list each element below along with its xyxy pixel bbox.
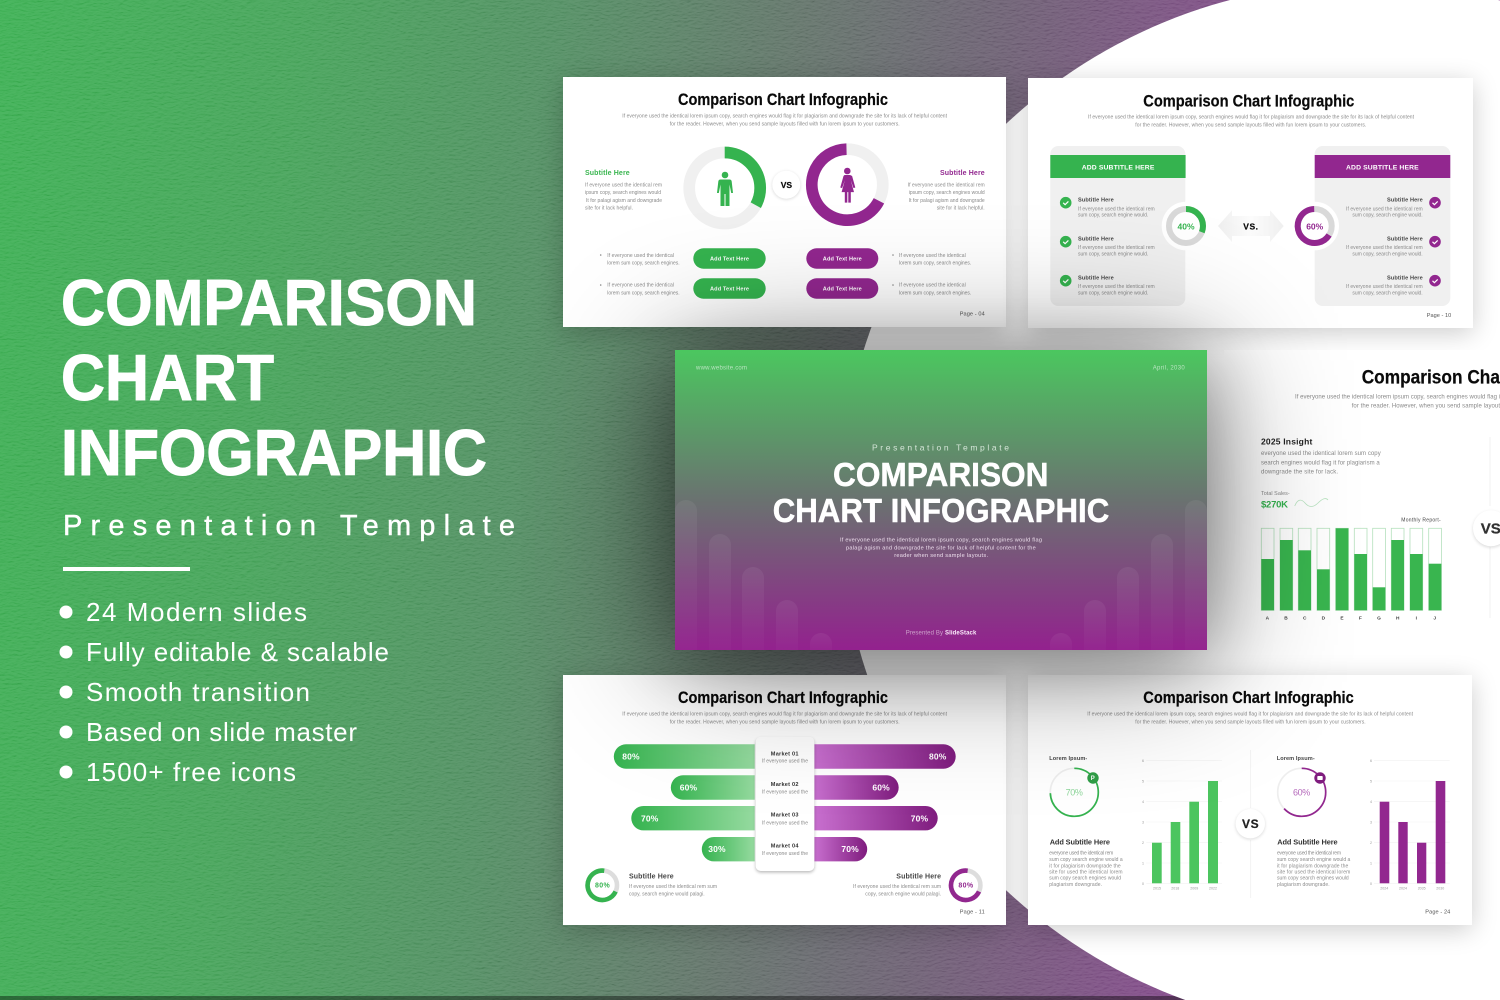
left progress ring: 70% [1066, 788, 1083, 798]
bar values: 70% [911, 813, 928, 823]
insight text: search engines would flag it for plagiarism a [1261, 460, 1380, 466]
intro text: for the reader. However, when you send sample layout [1352, 404, 1500, 410]
total sales: Total Sales- [1261, 491, 1290, 497]
left check list: sum copy, search engine would. [1078, 291, 1148, 297]
green bar chart: 2018 [1171, 886, 1179, 890]
right bullets: lorem sum copy, search engines. [899, 290, 971, 296]
purple donut [800, 137, 895, 232]
right text block: it for plagiarism downgrade the [1277, 863, 1349, 869]
cover title: CHART INFOGRAPHIC [773, 492, 1109, 529]
divider [1489, 437, 1491, 618]
feature list: Smooth transition [86, 677, 310, 707]
left mini donut: 80% [595, 883, 610, 890]
left caption: Subtitle Here [629, 873, 674, 880]
right card: ADD SUBTITLE HERE [1346, 164, 1419, 171]
intro text: If everyone used the identical lorem ipsum copy, search engines would flag it for plagiarism and downgrade the site for its lack of helpful content [1087, 712, 1414, 718]
insight text: downgrade the site for lack. [1261, 470, 1338, 476]
purple bar chart: 2035 [1418, 886, 1426, 890]
purple buttons [806, 248, 878, 299]
right text block: plagiarism downgrade. [1277, 882, 1330, 888]
bar values: 60% [680, 782, 697, 792]
right check list: If everyone used the identical rem [1346, 284, 1423, 290]
panel: slide page 04 donut comparison [563, 77, 1006, 332]
green buttons [693, 248, 766, 299]
left check list: Subtitle Here [1078, 236, 1114, 242]
feature list [60, 597, 389, 787]
left text block: site for used the identical lorem [1049, 870, 1123, 876]
left check list: Subtitle Here [1078, 275, 1114, 281]
page number: Page - 04 [960, 312, 985, 318]
market card: Market 02 [771, 782, 798, 788]
right subtitle text: Subtitle Here [940, 170, 985, 177]
bar values: 60% [872, 782, 890, 792]
right text block: Add Subtitle Here [1277, 837, 1338, 846]
right check list: Subtitle Here [1387, 236, 1423, 242]
bar values: 80% [622, 752, 640, 762]
left text block [1049, 837, 1123, 888]
purple bar chart: 2024 [1399, 886, 1407, 890]
right bullets: lorem sum copy, search engines. [899, 261, 971, 267]
bar values: 70% [841, 844, 859, 854]
purple buttons: Add Text Here [823, 287, 862, 293]
title: CHART [61, 341, 274, 414]
left subtitle text: Subtitle Here [585, 170, 630, 177]
purple bar chart [1370, 759, 1450, 890]
cover description: reader when send sample layouts. [894, 553, 988, 559]
right text block: sum copy search engines would [1277, 876, 1349, 882]
green bar chart: 2015 [1153, 886, 1161, 890]
right subtitle text: ipsum copy, search engines would [909, 190, 985, 196]
arrow: double headed VS [1218, 210, 1284, 242]
right check list: Subtitle Here [1387, 197, 1423, 203]
green bar chart: 2 [1142, 841, 1144, 845]
green bar chart: 4 [1142, 800, 1144, 804]
right subtitle text: site for it lack helpful. [937, 206, 985, 212]
divider line [63, 567, 190, 571]
presenter credit: Presented By [906, 630, 943, 636]
right caption: Subtitle Here [896, 873, 941, 880]
intro text [622, 712, 948, 726]
cover description: If everyone used the identical lorem ipsum copy, search engines would flag [840, 537, 1042, 543]
intro text [1088, 115, 1415, 128]
purple bar chart: 1 [1370, 862, 1372, 866]
intro text: If everyone used the identical lorem ipsum copy, search engines would flag it for plagiarism and downgrade the site for its lack of helpful content [1088, 115, 1415, 121]
intro text: for the reader. However, when you send sample layouts filled with fun lorem ipsum to your customers. [670, 720, 900, 726]
panel: slide insight bars (cropped at right edge) [1224, 350, 1500, 650]
monthly bar chart: F [1359, 616, 1362, 622]
purple bar chart: 6 [1370, 759, 1372, 763]
intro text: If everyone used the identical lorem ipsum copy, search engines would flag it for plagiarism and downgrade the site for its lack of helpful content [622, 114, 948, 120]
left progress ring: P [1091, 776, 1095, 782]
left progress ring: Lorem Ipsum- [1049, 756, 1087, 762]
left check list: Subtitle Here [1078, 197, 1114, 203]
panel: slide page 11 diverging bars [563, 675, 1006, 930]
right check list: Subtitle Here [1387, 275, 1423, 281]
left check list: If everyone used the identical rem [1078, 206, 1155, 212]
right mini donut: 80% [958, 883, 974, 890]
right subtitle text [908, 170, 985, 212]
intro text [622, 114, 948, 128]
left text block: it for plagiarism downgrade the [1049, 863, 1121, 869]
bar values: 70% [641, 813, 659, 823]
right bullets: If everyone used the identical [899, 283, 966, 289]
VS badge [1236, 809, 1265, 839]
total sales [1261, 491, 1328, 510]
market card: If everyone used the [762, 789, 808, 795]
panel: cover slide [675, 350, 1207, 650]
40% donut: 40% [1178, 221, 1195, 231]
green bar chart: 5 [1142, 780, 1144, 784]
presenter credit: SlideStack [945, 630, 977, 636]
cover title: COMPARISON [833, 456, 1048, 493]
icon: woman [840, 168, 855, 203]
intro text: If everyone used the identical lorem ipsum copy, search engines would flag it for plagiarism and downgrade the site for its lack of helpful content [622, 712, 948, 718]
purple bar chart: 0 [1370, 882, 1372, 886]
left subtitle text: It for palagi agism and downgrade [586, 198, 662, 204]
left check list: If everyone used the identical rem [1078, 284, 1155, 290]
heading: Comparison Chart Infographic [1143, 689, 1354, 707]
left bullets: lorem sum copy, search engines. [607, 261, 680, 267]
intro text: for the reader. However, when you send sample layouts filled with fun lorem ipsum to your customers. [1135, 720, 1366, 726]
intro text: for the reader. However, when you send sample layouts filled with fun lorem ipsum to your customers. [1135, 122, 1366, 128]
left subtitle text: If everyone used the identical rem [585, 182, 662, 188]
title [61, 266, 487, 489]
cover description [840, 537, 1042, 559]
left caption [629, 873, 717, 898]
purple bar chart: 2 [1370, 841, 1372, 845]
right check list [1346, 197, 1441, 297]
panel: slide page 24 bar charts [1028, 675, 1472, 930]
left subtitle text: ipsum copy, search engines would [585, 190, 661, 196]
left caption: copy, search engine would palagi. [629, 892, 705, 898]
left check list [1060, 197, 1155, 297]
VS badge [772, 171, 800, 200]
bar values [622, 752, 947, 854]
market card: Market 03 [771, 813, 798, 819]
monthly bar chart: J [1433, 616, 1436, 622]
headline block [60, 266, 515, 787]
left check list: If everyone used the identical rem [1078, 245, 1155, 251]
left bullets [600, 253, 680, 296]
monthly bar chart: G [1377, 616, 1381, 622]
green bar chart [1142, 759, 1222, 890]
left bullets: If everyone used the identical [607, 283, 674, 289]
page number: Page - 11 [960, 910, 985, 916]
left text block: sum copy search engine would a [1049, 857, 1123, 863]
purple bar chart: 5 [1370, 780, 1372, 784]
arrow: double headed VS: VS. [1243, 221, 1258, 231]
left check list: sum copy, search engine would. [1078, 213, 1148, 219]
right bullets [892, 253, 971, 296]
purple bars [814, 744, 956, 861]
total sales: $270K [1261, 499, 1288, 510]
intro text [1087, 712, 1414, 726]
purple bar chart: 4 [1370, 800, 1372, 804]
60% donut: 60% [1306, 221, 1324, 231]
green bar chart: 0 [1142, 882, 1144, 886]
left bullets: lorem sum copy, search engines. [607, 290, 680, 296]
market card: Market 04 [771, 843, 799, 849]
bar values: 30% [708, 844, 726, 854]
purple bar chart: 3 [1370, 820, 1372, 824]
icon: man [717, 172, 733, 206]
subtitle: Presentation Template [63, 510, 515, 542]
right caption: If everyone used the identical rem sum [853, 884, 941, 890]
right progress ring [1277, 756, 1326, 816]
bar values: 80% [929, 752, 947, 762]
left subtitle text [585, 170, 662, 212]
right caption: copy, search engine would palagi. [865, 892, 941, 898]
right text block: everyone used the identical rem [1277, 851, 1341, 857]
right check list: sum copy, search engine would. [1352, 252, 1423, 258]
bottom edge band [0, 996, 1500, 1000]
VS badge [1473, 510, 1500, 548]
market card: If everyone used the [762, 758, 808, 764]
right text block: sum copy search engine would a [1277, 857, 1351, 863]
left text block: plagiarism downgrade. [1049, 882, 1102, 888]
left card: ADD SUBTITLE HERE [1082, 164, 1155, 171]
right check list: If everyone used the identical rem [1346, 206, 1423, 212]
website and date [695, 365, 1185, 371]
right check list: sum copy, search engine would. [1352, 213, 1423, 219]
right caption [853, 873, 941, 898]
cover description: palagi agism and downgrade the site for lack of helpful content for the [846, 545, 1036, 551]
intro text: If everyone used the identical lorem ipsum copy, search engines would flag i [1295, 395, 1500, 401]
insight text [1261, 436, 1381, 476]
feature list: Based on slide master [86, 717, 357, 747]
panel: slide page 10 check lists [1028, 78, 1473, 333]
VS badge: VS [1242, 817, 1259, 831]
right bullets: If everyone used the identical [899, 253, 966, 259]
green buttons: Add Text Here [710, 257, 749, 263]
right text block [1277, 837, 1351, 888]
heading: Comparison Chart Infographic [678, 91, 888, 109]
right subtitle text: It for palagi agism and downgrade [909, 198, 985, 204]
market card: If everyone used the [762, 820, 808, 826]
white circle backdrop [840, 0, 1500, 1000]
left check list: sum copy, search engine would. [1078, 252, 1148, 258]
green bars [614, 744, 755, 861]
right mini donut [946, 866, 985, 905]
cover eyebrow: Presentation Template [872, 443, 1009, 453]
green bar chart: 2009 [1190, 886, 1198, 890]
monthly bar chart: H [1396, 616, 1400, 622]
green bar chart: 6 [1142, 759, 1144, 763]
left card [1050, 146, 1186, 306]
left mini donut [583, 866, 622, 905]
right progress ring: 60% [1293, 788, 1310, 798]
intro text [1295, 395, 1500, 410]
monthly bar chart: A [1266, 616, 1270, 622]
right check list: sum copy, search engine would. [1352, 291, 1423, 297]
insight text: 2025 Insight [1261, 436, 1312, 446]
VS badge: VS [781, 180, 792, 190]
heading: Comparison Chart Infographic [678, 689, 888, 707]
left text block: sum copy search engines would [1049, 876, 1121, 882]
left progress ring [1049, 756, 1099, 816]
60% donut [1290, 202, 1339, 250]
website and date: www.website.com [695, 365, 747, 371]
intro text: for the reader. However, when you send sample layouts filled with fun lorem ipsum to your customers. [670, 122, 900, 128]
left text block: Add Subtitle Here [1050, 837, 1110, 846]
monthly bar chart: E [1340, 616, 1344, 622]
purple bar chart: 2030 [1436, 886, 1444, 890]
heading: Comparison Chart Infographic [1143, 92, 1354, 110]
market card: If everyone used the [762, 851, 808, 857]
green bar chart: 3 [1142, 820, 1144, 824]
green bar chart: 1 [1142, 862, 1144, 866]
right text block: site for used the identical lorem [1277, 870, 1350, 876]
insight text: everyone used the identical lorem sum copy [1261, 451, 1381, 457]
monthly bar chart: B [1284, 616, 1288, 622]
title: COMPARISON [61, 266, 477, 339]
right card [1315, 146, 1450, 306]
purple bar chart: 2024 [1380, 886, 1388, 890]
presenter credit [906, 630, 977, 636]
left bullets: If everyone used the identical [607, 253, 674, 259]
monthly report label: Monthly Report- [1401, 517, 1441, 523]
center slide shadow [675, 360, 1207, 660]
decorative pills [675, 500, 1207, 650]
center divider [1250, 750, 1252, 898]
feature list: Fully editable & scalable [86, 637, 389, 667]
feature list: 24 Modern slides [86, 597, 307, 627]
green bar chart: 2022 [1209, 886, 1217, 890]
green buttons: Add Text Here [710, 287, 749, 293]
right check list: If everyone used the identical rem [1346, 245, 1423, 251]
market card: Market 01 [771, 751, 798, 757]
page number: Page - 10 [1427, 313, 1451, 319]
feature list: 1500+ free icons [86, 757, 296, 787]
left caption: If everyone used the identical rem sum [629, 884, 717, 890]
left subtitle text: site for it lack helpful. [585, 206, 633, 212]
purple buttons: Add Text Here [823, 257, 862, 263]
40% donut [1162, 202, 1210, 250]
monthly bar chart: I [1416, 616, 1418, 622]
monthly bar chart: D [1322, 616, 1326, 622]
monthly bar chart: C [1303, 616, 1307, 622]
right progress ring: Lorem Ipsum- [1277, 756, 1315, 762]
cover title [773, 456, 1109, 529]
page number: Page - 24 [1425, 910, 1450, 916]
market card [756, 737, 814, 872]
left text block: everyone used the identical rem [1049, 851, 1113, 857]
title: INFOGRAPHIC [61, 416, 487, 489]
monthly bar chart [1261, 528, 1441, 622]
right subtitle text: If everyone used the identical rem [908, 182, 985, 188]
website and date: April, 2030 [1153, 365, 1185, 371]
green donut [689, 152, 760, 224]
